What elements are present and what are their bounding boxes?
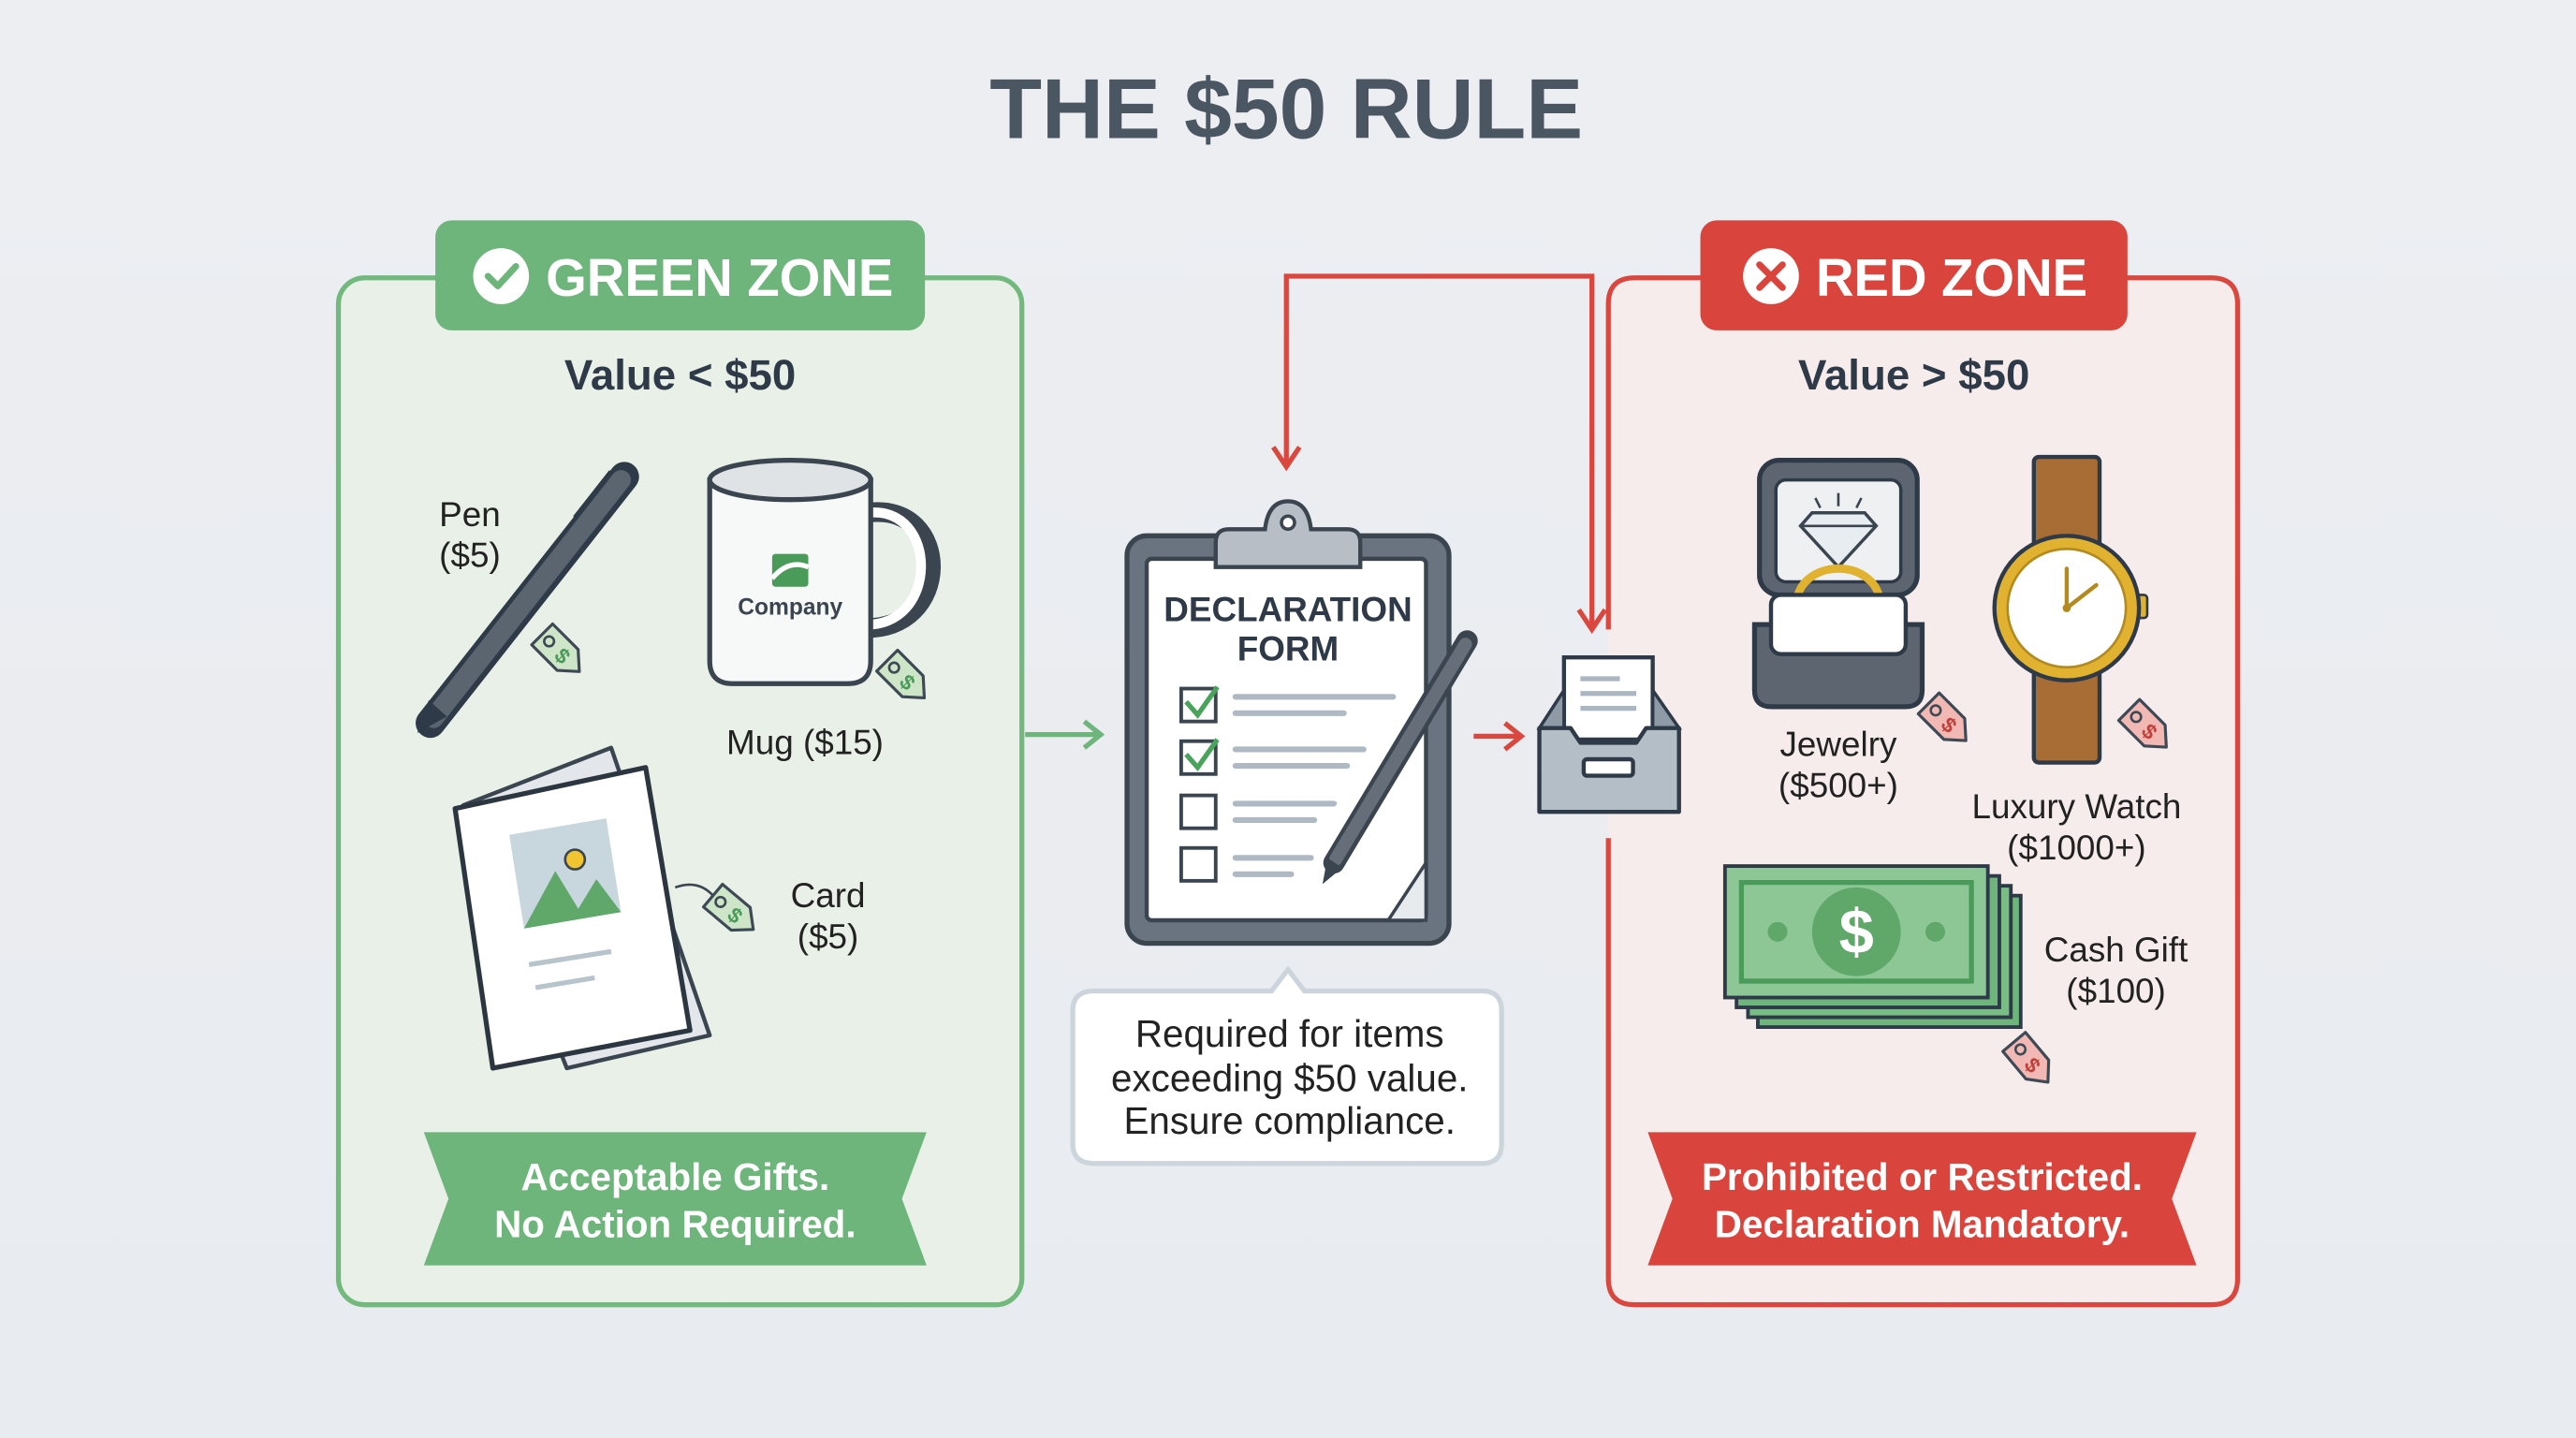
label: jewelry: Jewelry: [1780, 725, 1897, 763]
icon: mug: Company: [738, 595, 842, 621]
callout: requirement note: Required for items: [1135, 1012, 1444, 1055]
green zone tab: GREEN ZONE: [546, 248, 893, 307]
icon: declaration form clipboard: DECLARATION: [1164, 591, 1412, 629]
label: pen: Pen: [439, 495, 501, 534]
icon: declaration form clipboard: [1127, 501, 1467, 944]
green zone tab: [435, 220, 925, 330]
arrow: red loop feedback: [1273, 276, 1605, 629]
banner: prohibited: [1647, 1132, 2197, 1266]
panel: red zone: ($500+): [1778, 766, 1898, 804]
icon: card: [455, 748, 763, 1068]
callout: requirement note: exceeding $50 value.: [1111, 1057, 1468, 1100]
icon: declaration form clipboard: FORM: [1237, 630, 1339, 668]
icon: ring box: [1754, 461, 1976, 751]
heading: value > $50: Value > $50: [1798, 351, 2029, 399]
callout: requirement note: [1073, 970, 1501, 1164]
icon: mug: [710, 461, 935, 709]
label: mug: Mug ($15): [726, 724, 884, 762]
label: luxury watch: Luxury Watch: [1972, 787, 2181, 826]
red zone tab: [1701, 220, 2128, 330]
icon: cash stack: [1725, 866, 2059, 1092]
arrow: form to inbox: [1473, 723, 1521, 749]
banner: acceptable gifts: Acceptable Gifts.: [520, 1155, 829, 1198]
panel: red zone: ($100): [2066, 972, 2166, 1010]
banner: prohibited: Prohibited or Restricted.: [1702, 1155, 2143, 1198]
title: THE $50 RULE: [989, 62, 1583, 157]
banner: acceptable gifts: [424, 1132, 927, 1266]
red zone tab: RED ZONE: [1816, 248, 2087, 307]
arrow: green to form: [1025, 722, 1101, 748]
panel: red zone: ($1000+): [2007, 829, 2146, 867]
icon: pen: [417, 472, 624, 733]
label: card: Card: [791, 876, 866, 915]
banner: prohibited: Declaration Mandatory.: [1715, 1203, 2130, 1246]
callout: requirement note: Ensure compliance.: [1124, 1099, 1456, 1142]
panel: red zone: [1608, 220, 2237, 1305]
icon: luxury watch: [1995, 457, 2176, 763]
panel: green zone: ($5): [798, 917, 858, 956]
banner: acceptable gifts: No Action Required.: [494, 1203, 856, 1246]
panel: green zone: [339, 220, 1022, 1305]
heading: value < $50: Value < $50: [564, 351, 796, 399]
icon: inbox file tray: [1540, 657, 1679, 812]
icon: cash stack: $: [1839, 898, 1874, 967]
label: cash gift: Cash Gift: [2044, 931, 2188, 969]
panel: green zone: ($5): [439, 536, 501, 575]
